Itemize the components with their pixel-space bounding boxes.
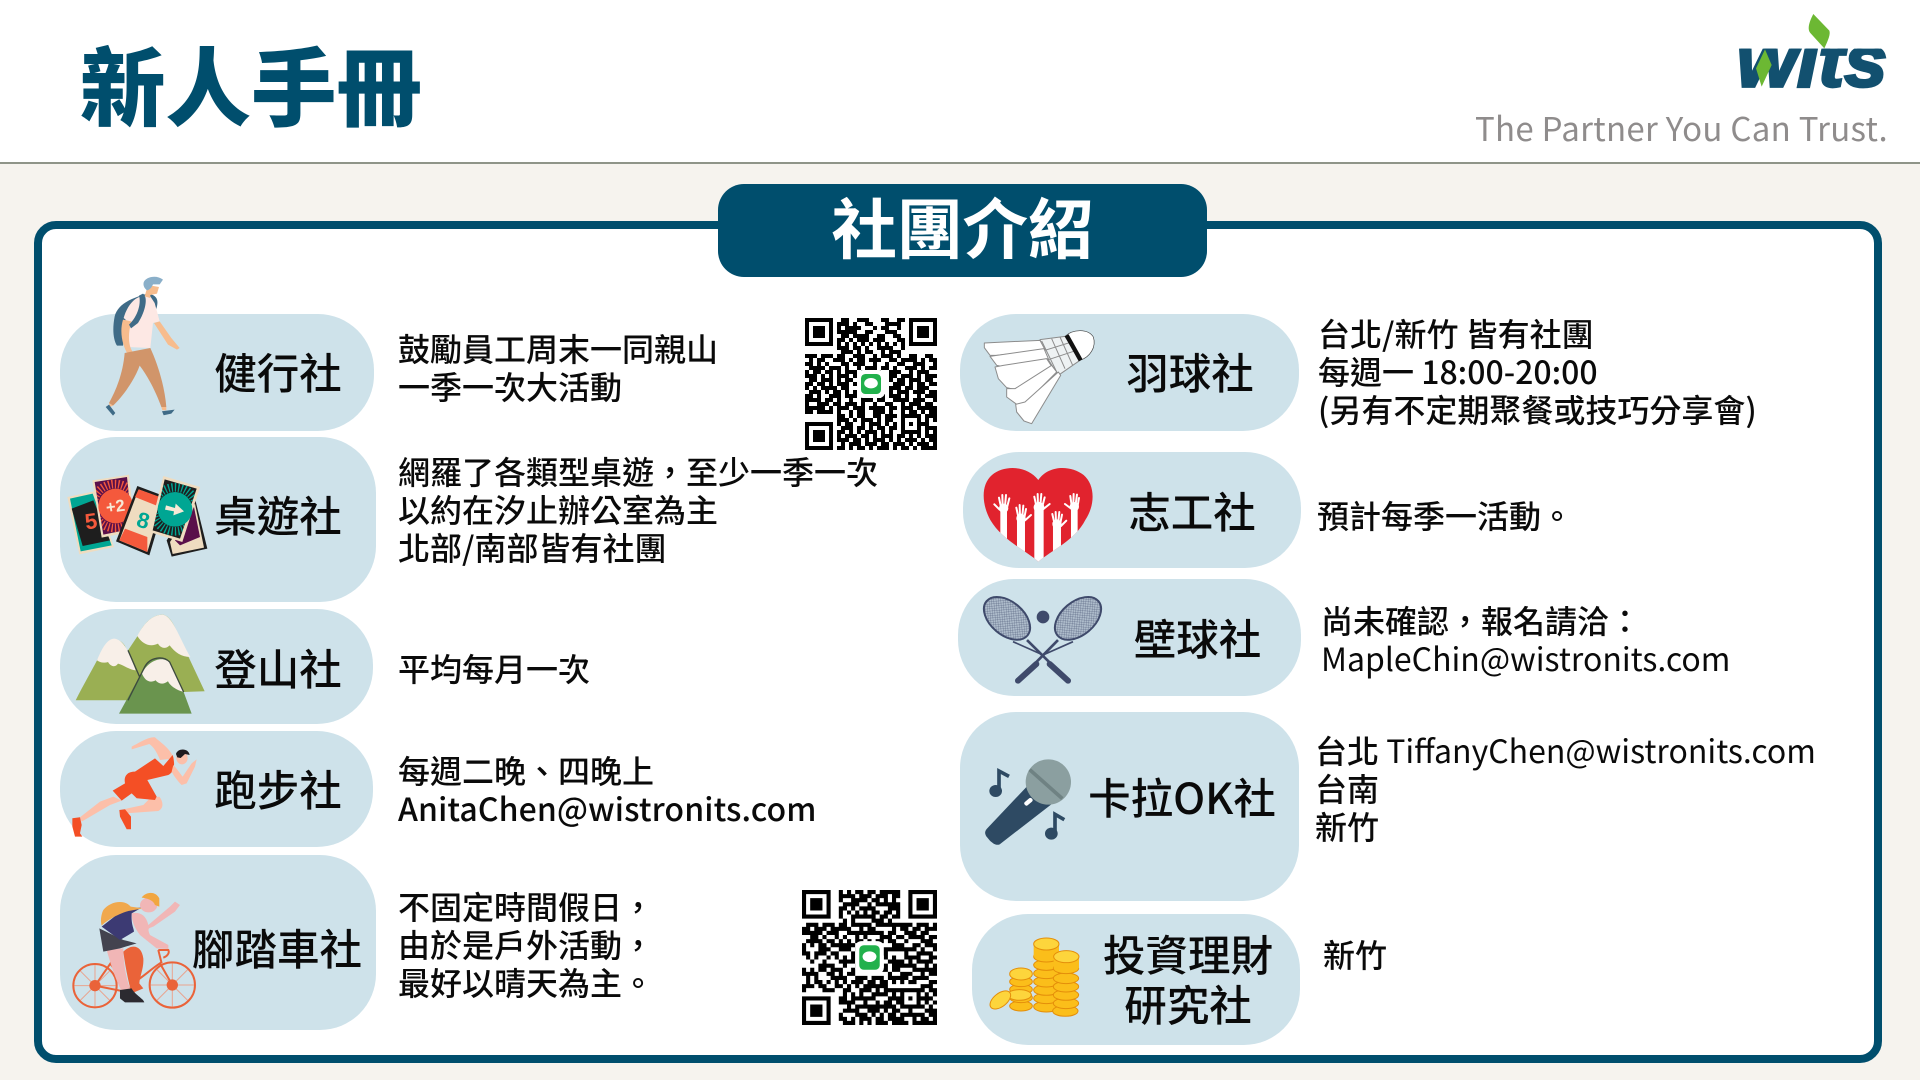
description: hiking bbox=[398, 325, 718, 409]
label: 腳踏車社 bbox=[192, 917, 362, 978]
label: 登山社 bbox=[214, 637, 342, 698]
label: 壁球社 bbox=[1134, 607, 1261, 668]
label: 跑步社 bbox=[214, 758, 342, 819]
club pill: volunteer bbox=[963, 452, 1301, 568]
QR code: cycling bbox=[802, 890, 937, 1025]
description: cycling bbox=[398, 883, 654, 1005]
QR code: hiking bbox=[805, 318, 937, 450]
header bar bbox=[0, 0, 1920, 164]
section badge: 社團介紹: 社團介紹 bbox=[831, 177, 1094, 272]
description: volunteer: 預計每季一活動。 bbox=[1317, 492, 1573, 538]
description: karaoke: 台南 bbox=[1315, 765, 1379, 811]
description: cycling: 不固定時間假日， bbox=[398, 883, 654, 929]
description: running: AnitaChen@wistronits.com bbox=[398, 785, 817, 831]
description: board games: 網羅了各類型桌遊，至少一季一次 bbox=[398, 448, 878, 494]
label: 志工社 bbox=[1128, 480, 1256, 541]
club pill: mountaineering bbox=[60, 609, 373, 724]
label: 桌遊社 bbox=[214, 484, 342, 545]
icon: playing cards: 5 bbox=[83, 508, 99, 534]
description: hiking: 鼓勵員工周末一同親山 bbox=[398, 325, 718, 371]
icon: crossed rackets bbox=[982, 596, 1102, 684]
description: karaoke bbox=[1315, 727, 1816, 849]
icon: sprinter bbox=[72, 737, 196, 837]
icon: playing cards bbox=[67, 474, 208, 557]
label: 羽球社 bbox=[1126, 341, 1254, 402]
club pill: squash bbox=[958, 579, 1301, 696]
icon: cyclist bbox=[72, 892, 196, 1009]
icon: microphone with notes bbox=[985, 759, 1071, 845]
description: board games: 北部/南部皆有社團 bbox=[398, 524, 666, 570]
description: badminton: 每週一 18:00-20:00 bbox=[1318, 348, 1598, 394]
description: running bbox=[398, 747, 817, 831]
icon: playing cards: +2 bbox=[105, 495, 126, 517]
description: running: 每週二晚、四晚上 bbox=[398, 747, 654, 793]
icon: heart with raised hands bbox=[984, 468, 1093, 562]
label: 卡拉OK社 bbox=[1088, 766, 1276, 827]
label: 投資理財 bbox=[1103, 923, 1273, 984]
description: board games bbox=[398, 448, 878, 570]
description: badminton bbox=[1318, 310, 1757, 432]
label bbox=[1103, 923, 1273, 1034]
club pill: cycling bbox=[60, 855, 376, 1030]
description: investing: 新竹 bbox=[1323, 931, 1387, 977]
description: badminton: (另有不定期聚餐或技巧分享會) bbox=[1318, 386, 1757, 432]
main panel bbox=[34, 221, 1882, 1063]
description: badminton: 台北/新竹 皆有社團 bbox=[1318, 310, 1594, 356]
description: squash: 尚未確認，報名請洽： bbox=[1321, 597, 1641, 643]
club pill: investing bbox=[972, 914, 1300, 1045]
description: karaoke: 台北 TiffanyChen@wistronits.com bbox=[1315, 727, 1816, 773]
description: karaoke: 新竹 bbox=[1315, 803, 1379, 849]
icon: mountains bbox=[76, 614, 205, 714]
icon: shuttlecock bbox=[984, 330, 1094, 424]
description: squash bbox=[1321, 597, 1730, 681]
logo: wits bbox=[1737, 21, 1887, 103]
description: mountaineering: 平均每月一次 bbox=[398, 645, 590, 691]
icon: gold coin stacks bbox=[990, 938, 1080, 1017]
icon: walking hiker bbox=[106, 276, 180, 416]
club pill: board games bbox=[60, 437, 376, 602]
description: cycling: 由於是戶外活動， bbox=[398, 921, 654, 967]
description: cycling: 最好以晴天為主。 bbox=[398, 959, 654, 1005]
description: hiking: 一季一次大活動 bbox=[398, 363, 622, 409]
club pill: badminton bbox=[960, 314, 1299, 431]
title: 新人手冊 bbox=[80, 20, 422, 144]
icon: playing cards: 8 bbox=[134, 507, 152, 534]
label: 健行社 bbox=[214, 341, 342, 402]
section badge: 社團介紹 bbox=[718, 184, 1207, 277]
description: board games: 以約在汐止辦公室為主 bbox=[398, 486, 718, 532]
description: squash: MapleChin@wistronits.com bbox=[1321, 635, 1730, 681]
club pill: karaoke bbox=[960, 712, 1299, 901]
label: 研究社 bbox=[1124, 973, 1252, 1034]
club pill: hiking bbox=[60, 314, 374, 431]
club pill: running bbox=[60, 731, 373, 847]
tagline: The Partner You Can Trust. bbox=[1475, 103, 1888, 151]
